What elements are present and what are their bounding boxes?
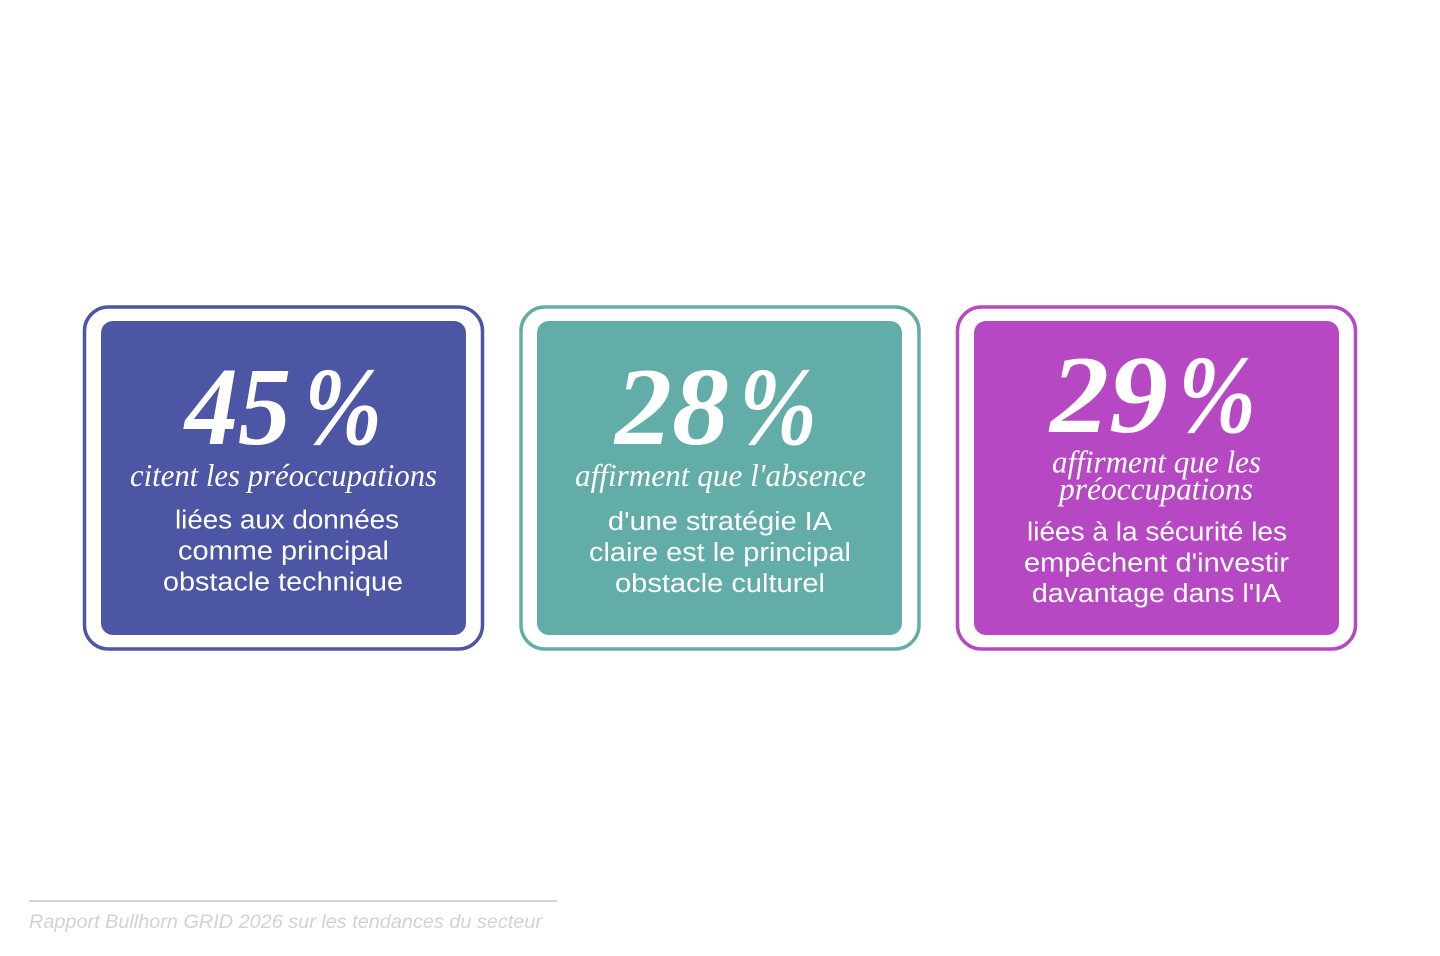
statistic: 29%: % [1178,334,1256,457]
serif lead-in text: affirment que les [1052,444,1261,480]
description text: obstacle technique [163,569,403,597]
panel outline [521,307,919,649]
statistic: 45%: % [304,346,382,469]
statistic: 28%: % [739,346,817,469]
panel fill [537,321,902,635]
description text [163,507,403,597]
panel outline [958,307,1356,649]
description text: empêchent d'investir [1024,550,1290,578]
description text: liées aux données [175,507,399,535]
description text: claire est le principal [589,539,851,567]
description text [1024,518,1290,608]
description text: liées à la sécurité les [1027,518,1287,546]
serif lead-in text [1052,444,1261,506]
serif lead-in text: préoccupations [1057,470,1253,506]
description text: davantage dans l'IA [1032,580,1281,608]
panel: 29% security concerns [958,307,1356,649]
serif lead-in text: citent les préoccupations [130,457,437,493]
panel fill [101,321,466,635]
serif lead-in text: affirment que l'absence [575,457,866,493]
statistic: 45% [183,346,382,469]
statistic: 28% [613,346,817,469]
panel: 45% technical obstacle [84,307,482,649]
statistic: 29%: 29 [1048,334,1168,457]
panel fill [974,321,1339,635]
description text: d'une stratégie IA [608,508,832,536]
description text: obstacle culturel [615,570,825,598]
statistic: 29% [1048,334,1256,457]
panel outline [84,307,482,649]
description text: comme principal [178,538,389,566]
source text: Rapport Bullhorn GRID 2026 sur les tendances du secteur [29,912,543,933]
statistic: 28%: 28 [613,346,729,469]
statistic: 45%: 45 [183,346,291,469]
panel: 28% cultural obstacle [521,307,919,649]
description text [589,508,851,598]
